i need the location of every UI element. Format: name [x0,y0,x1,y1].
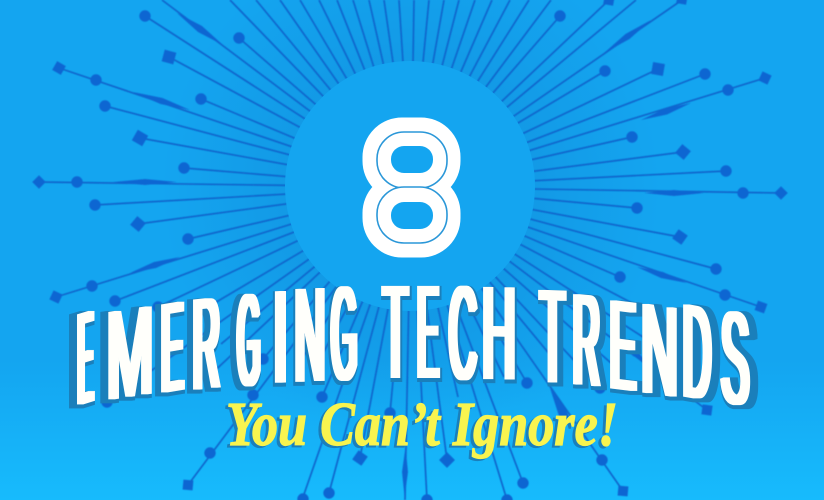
word: TRENDS [540,260,749,435]
word: EMERGING [78,258,357,433]
subtitle shadow: You Can’t Ignore! [223,393,615,461]
numeral 8 [364,97,459,289]
word: TECH: H [482,259,516,409]
word: TRENDS: N [641,275,678,425]
ornamental loops: band, inline stroke and counter of each bowl [370,125,453,250]
word: TRENDS: T [540,260,565,411]
word: EMERGING: R [193,270,220,419]
word: EMERGING: E [78,282,93,433]
central circle [285,61,535,311]
spindle thickenings on long rays [113,13,704,497]
word: TRENDS: E [610,273,636,420]
halo behind rays [161,0,661,437]
subtitle: You Can't Ignore! [223,391,618,461]
word: EMERGING: I [273,262,288,412]
word: EMERGING: G [331,258,357,409]
word: TRENDS: D [683,275,711,429]
word: TRENDS: S [721,280,749,435]
word: TECH: T [383,256,408,406]
subtitle face: You Can’t Ignore! [226,391,618,459]
title: EMERGING TECH TRENDS [78,256,749,435]
word: EMERGING: E [161,273,183,420]
digit: 8 [364,97,459,289]
word: TECH: E [418,257,439,407]
word: EMERGING: G [238,267,260,415]
word: TRENDS: R [573,267,600,415]
word: TECH [383,256,516,409]
word: TECH: C [449,258,477,408]
word: EMERGING: M [107,278,153,427]
word: EMERGING: N [295,259,325,412]
